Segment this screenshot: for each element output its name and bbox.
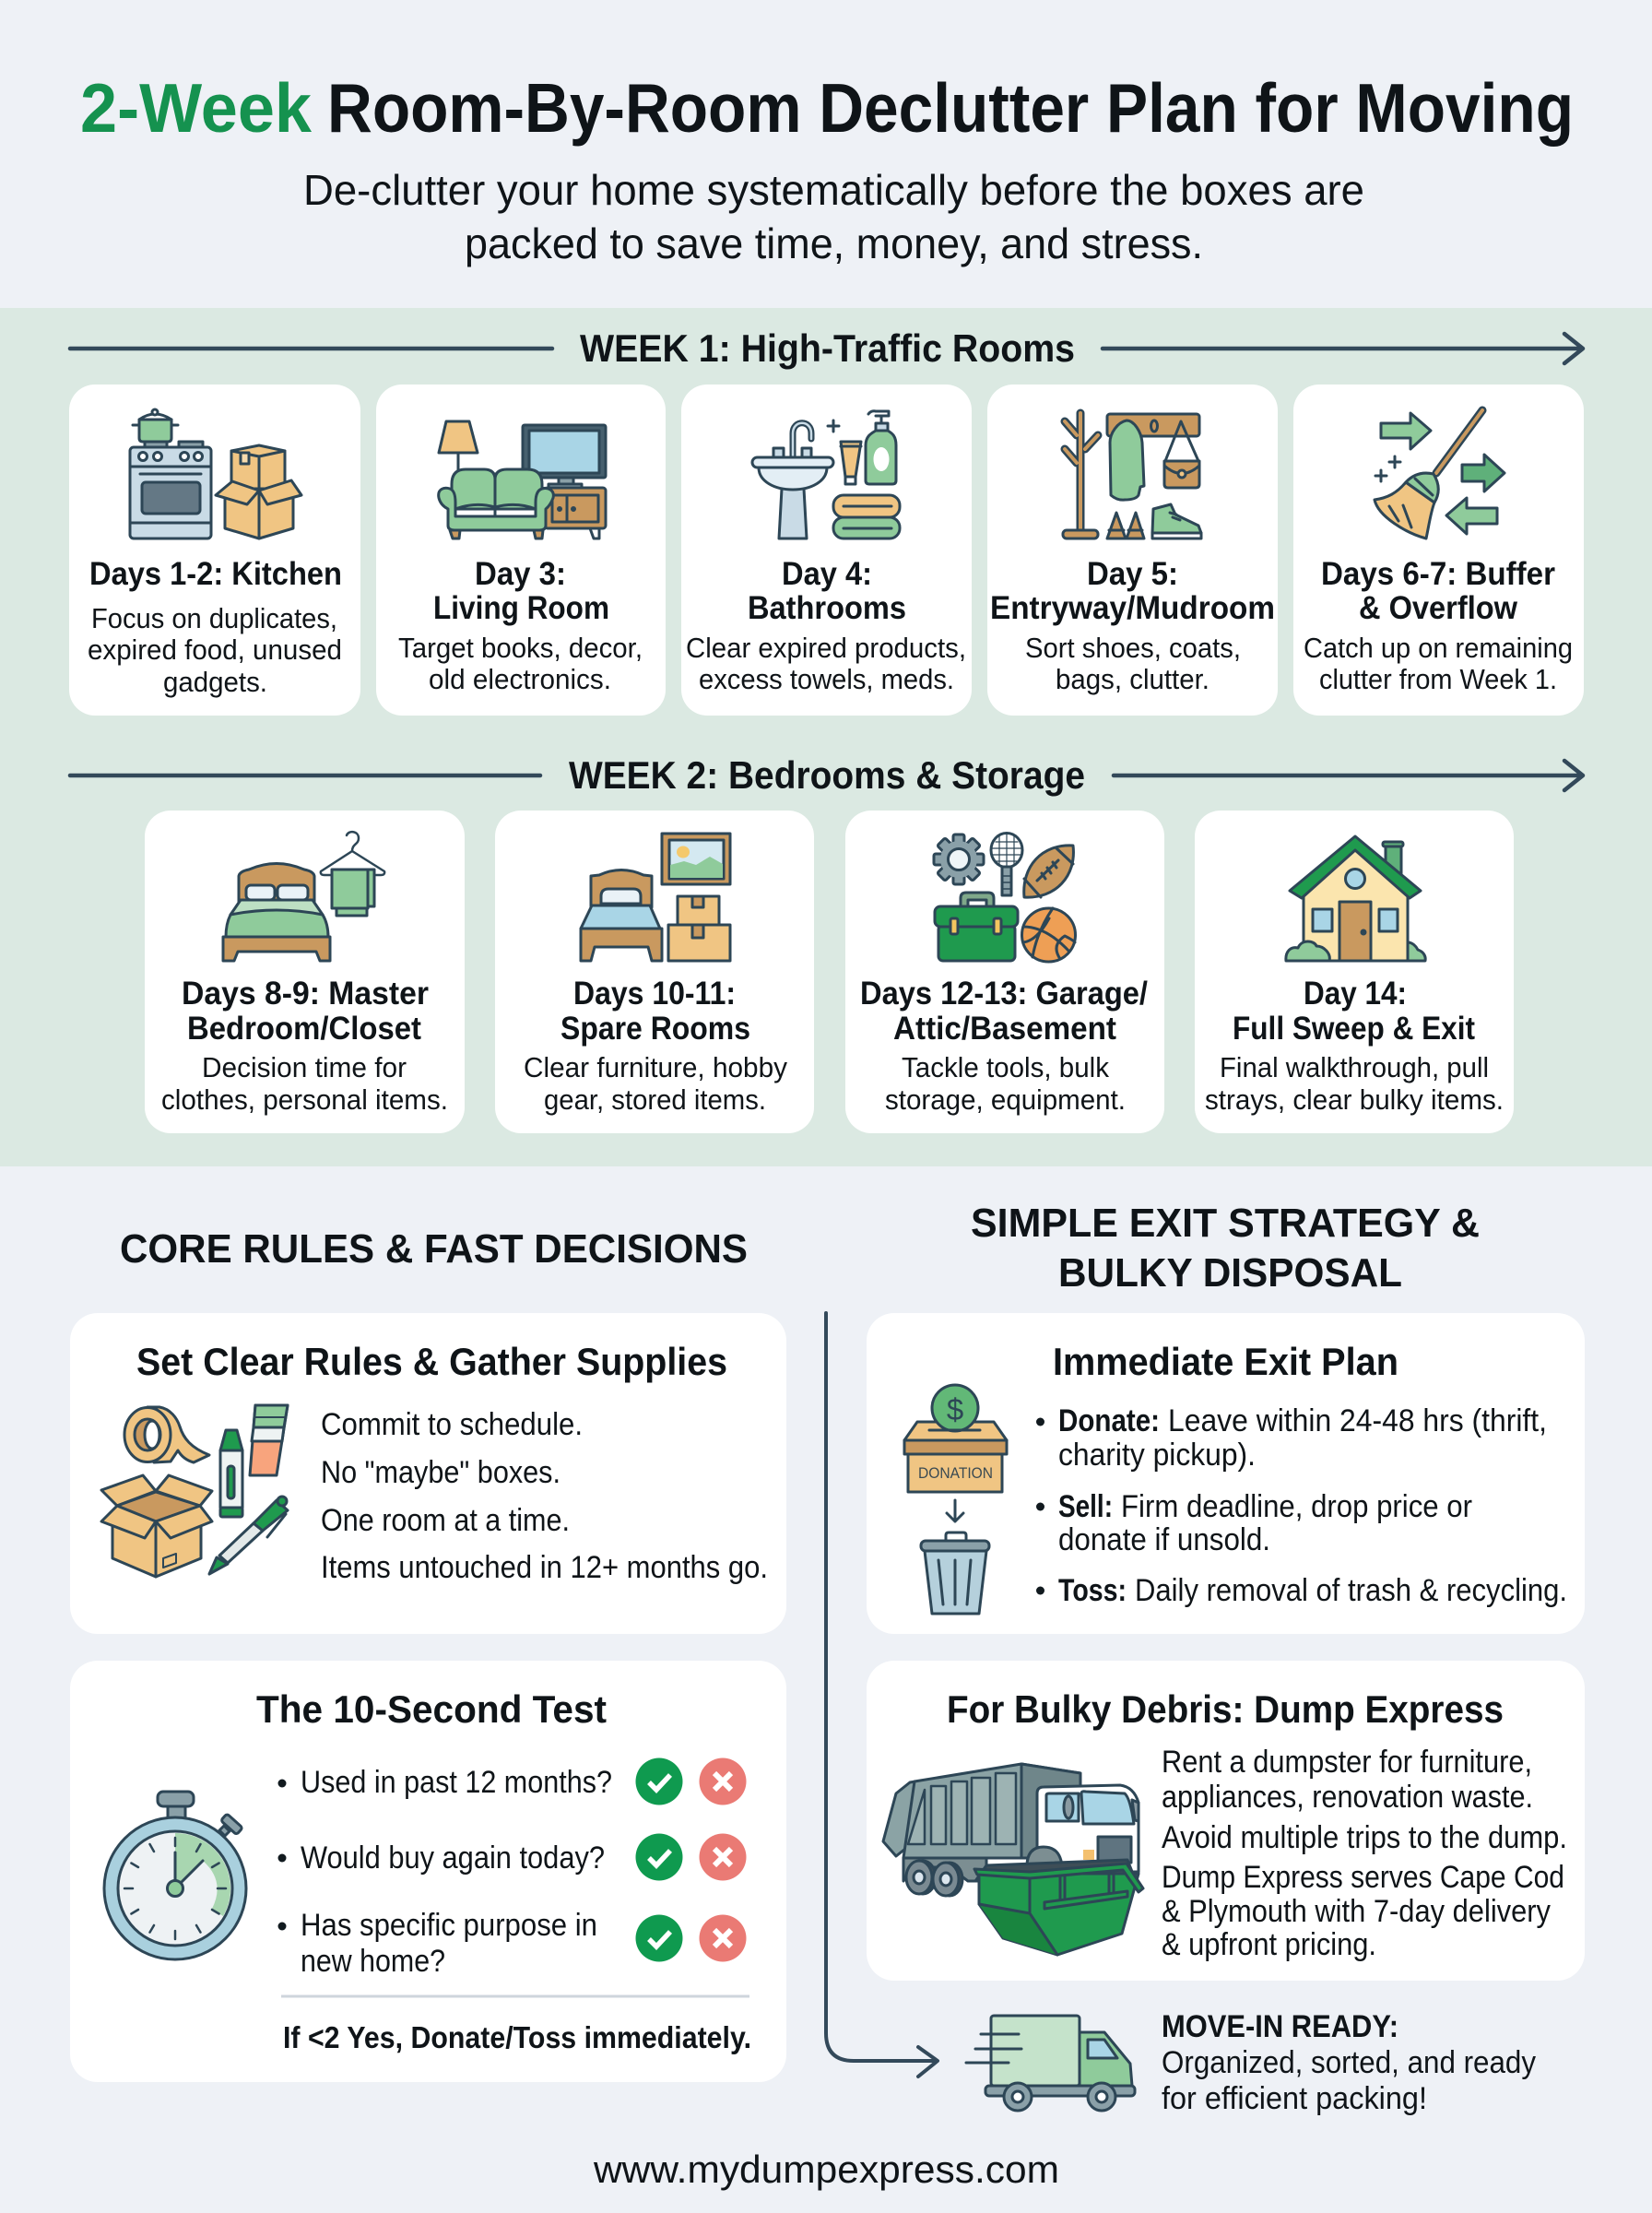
icon: sofa, lamp and tv: [439, 421, 606, 538]
dumpster description: Dump Express serves Cape Cod: [1162, 1860, 1564, 1895]
subtitle: De-clutter your home systematically before the boxes are: [303, 166, 1364, 214]
card title: [560, 976, 750, 1047]
panel: weekly schedule band: [0, 308, 1652, 1166]
heading: exit strategy: SIMPLE EXIT STRATEGY &: [971, 1201, 1480, 1246]
card description: [885, 1051, 1126, 1116]
card title: & Overflow: [1359, 590, 1518, 626]
icon: bed, picture and boxes: [581, 834, 730, 961]
panel heading: Set Clear Rules & Gather Supplies: [136, 1340, 727, 1383]
dumpster description: appliances, renovation waste.: [1162, 1780, 1533, 1815]
card: full sweep: [1195, 811, 1514, 1133]
card title: Day 14:: [1304, 976, 1407, 1012]
icon: tools and sports gear: [934, 834, 1075, 962]
dumpster description: Rent a dumpster for furniture,: [1162, 1745, 1532, 1780]
exit options list: [1036, 1403, 1567, 1608]
panel: set clear rules: [70, 1313, 786, 1634]
card title: Bathrooms: [748, 590, 906, 626]
card description: gadgets.: [163, 666, 267, 698]
card description: [1205, 1051, 1504, 1116]
card description: gear, stored items.: [544, 1083, 766, 1116]
icon: donation box and trash can: DONATION: [918, 1464, 993, 1482]
card: living room: [376, 385, 666, 716]
card description: Clear furniture, hobby: [524, 1051, 787, 1083]
footer url: www.mydumpexpress.com: [593, 2148, 1059, 2191]
card description: Tackle tools, bulk: [902, 1051, 1109, 1083]
panel: bulky debris: [867, 1661, 1585, 1981]
arrow: flow to move-in: [826, 1313, 938, 2077]
heading: exit strategy: [971, 1201, 1480, 1296]
icon: donation box and trash can: [904, 1385, 1007, 1614]
rules list: Items untouched in 12+ months go.: [321, 1550, 768, 1585]
panel: 10-second test: [70, 1661, 786, 2082]
card title: Days 8-9: Master: [182, 976, 429, 1012]
exit options list: Sell:: [1058, 1489, 1113, 1524]
rules list: [321, 1407, 768, 1585]
card title: Entryway/Mudroom: [990, 590, 1275, 626]
card: spare rooms: [495, 811, 814, 1133]
icon: packing supplies: [101, 1405, 288, 1577]
card: garage: [845, 811, 1164, 1133]
rule conclusion: If <2 Yes, Donate/Toss immediately.: [283, 2020, 751, 2054]
card description: Clear expired products,: [686, 632, 966, 664]
yes and no icons: [636, 1757, 747, 1962]
card: master bedroom: [145, 811, 465, 1133]
panel heading: For Bulky Debris: Dump Express: [947, 1687, 1504, 1731]
card description: Sort shoes, coats,: [1025, 632, 1241, 664]
dumpster description: [1162, 1745, 1567, 1962]
card description: strays, clear bulky items.: [1205, 1083, 1504, 1116]
card title: Spare Rooms: [560, 1011, 750, 1047]
card description: expired food, unused: [88, 633, 342, 666]
card description: storage, equipment.: [885, 1083, 1126, 1116]
card title: Days 1-2: Kitchen: [89, 556, 342, 592]
card title: [860, 976, 1148, 1047]
week 2 header with arrow: WEEK 2: Bedrooms & Storage: [569, 753, 1085, 797]
panel heading: The 10-Second Test: [256, 1687, 607, 1731]
exit options list: charity pickup).: [1058, 1438, 1256, 1473]
card description: Decision time for: [202, 1051, 407, 1083]
panel heading: Immediate Exit Plan: [1053, 1340, 1398, 1383]
panel: immediate exit plan: [867, 1313, 1585, 1634]
card description: [1304, 632, 1573, 695]
card description: bags, clutter.: [1056, 663, 1210, 695]
rules list: Commit to schedule.: [321, 1407, 583, 1442]
dumpster description: Avoid multiple trips to the dump.: [1162, 1820, 1567, 1855]
card: bathrooms: [681, 385, 972, 716]
exit options list: donate if unsold.: [1058, 1522, 1270, 1557]
move-in ready note: Organized, sorted, and ready: [1162, 2045, 1536, 2080]
card description: Focus on duplicates,: [91, 602, 337, 634]
rules list: One room at a time.: [321, 1503, 570, 1538]
heading: exit strategy: BULKY DISPOSAL: [1058, 1250, 1402, 1296]
card: buffer and overflow: [1293, 385, 1584, 716]
heading: core rules: CORE RULES & FAST DECISIONS: [120, 1226, 748, 1272]
icon: stopwatch: [104, 1792, 246, 1959]
checklist questions: Has specific purpose in: [301, 1908, 597, 1943]
card title: Living Room: [433, 590, 609, 626]
exit options list: Daily removal of trash & recycling.: [1135, 1573, 1567, 1608]
card description: [398, 632, 643, 695]
move-in ready note: [1162, 2009, 1536, 2116]
week 1 header with arrow: WEEK 1: High-Traffic Rooms: [580, 326, 1075, 370]
icon: donation box and trash can: $: [947, 1392, 963, 1426]
checklist questions: new home?: [301, 1944, 445, 1979]
card: entryway: [987, 385, 1278, 716]
subtitle: packed to save time, money, and stress.: [465, 219, 1203, 267]
move-in ready note: for efficient packing!: [1162, 2081, 1427, 2116]
icon: broom and arrows: [1375, 410, 1504, 538]
card title: [182, 976, 429, 1047]
checklist questions: [278, 1765, 612, 1979]
icon: truck and dumpster: [883, 1764, 1143, 1955]
dumpster description: & Plymouth with 7-day delivery: [1162, 1894, 1551, 1929]
exit options list: Leave within 24-48 hrs (thrift,: [1168, 1403, 1547, 1438]
card description: Final walkthrough, pull: [1220, 1051, 1489, 1083]
card title: Day 5:: [1087, 556, 1178, 592]
card description: excess towels, meds.: [699, 663, 954, 695]
card title: [990, 556, 1275, 626]
move-in ready note: MOVE-IN READY:: [1162, 2009, 1398, 2044]
card title: Day 4:: [782, 556, 872, 592]
week 2 header with arrow: [70, 753, 1583, 797]
exit options list: Donate:: [1058, 1403, 1160, 1438]
rules list: No "maybe" boxes.: [321, 1455, 560, 1490]
card description: old electronics.: [429, 663, 611, 695]
card title: Attic/Basement: [893, 1011, 1116, 1047]
card description: [686, 632, 966, 695]
card title: Days 6-7: Buffer: [1321, 556, 1555, 592]
card description: [1025, 632, 1241, 695]
icon: sink and toiletries: [752, 411, 900, 538]
card title: Bedroom/Closet: [187, 1011, 421, 1047]
card: kitchen: [69, 385, 360, 716]
card title: Day 3:: [475, 556, 566, 592]
icon: coat rack and shoes: [1063, 413, 1201, 538]
dumpster description: & upfront pricing.: [1162, 1927, 1376, 1962]
card title: Days 12-13: Garage/: [860, 976, 1148, 1012]
subtitle: [303, 166, 1364, 267]
exit options list: Toss:: [1058, 1573, 1127, 1608]
checklist questions: Used in past 12 months?: [301, 1765, 612, 1800]
card title: [1321, 556, 1555, 626]
icon: house: [1286, 836, 1425, 961]
card title: [1233, 976, 1475, 1047]
card title: Full Sweep & Exit: [1233, 1011, 1475, 1047]
card title: [748, 556, 906, 626]
card description: clothes, personal items.: [161, 1083, 448, 1116]
card description: [161, 1051, 448, 1116]
icon: moving truck: [966, 2016, 1135, 2111]
card description: Target books, decor,: [398, 632, 643, 664]
card title: Days 10-11:: [573, 976, 736, 1012]
exit options list: Firm deadline, drop price or: [1121, 1489, 1472, 1524]
card title: [433, 556, 609, 626]
card description: Catch up on remaining: [1304, 632, 1573, 664]
card description: [88, 602, 342, 698]
checklist questions: Would buy again today?: [301, 1840, 605, 1876]
icon: stove and boxes: [130, 409, 301, 538]
card description: clutter from Week 1.: [1319, 663, 1557, 695]
title: 2-Week: [80, 69, 312, 147]
week 1 header with arrow: [70, 326, 1583, 370]
card description: [524, 1051, 787, 1116]
icon: bed and hanger: [223, 832, 384, 961]
